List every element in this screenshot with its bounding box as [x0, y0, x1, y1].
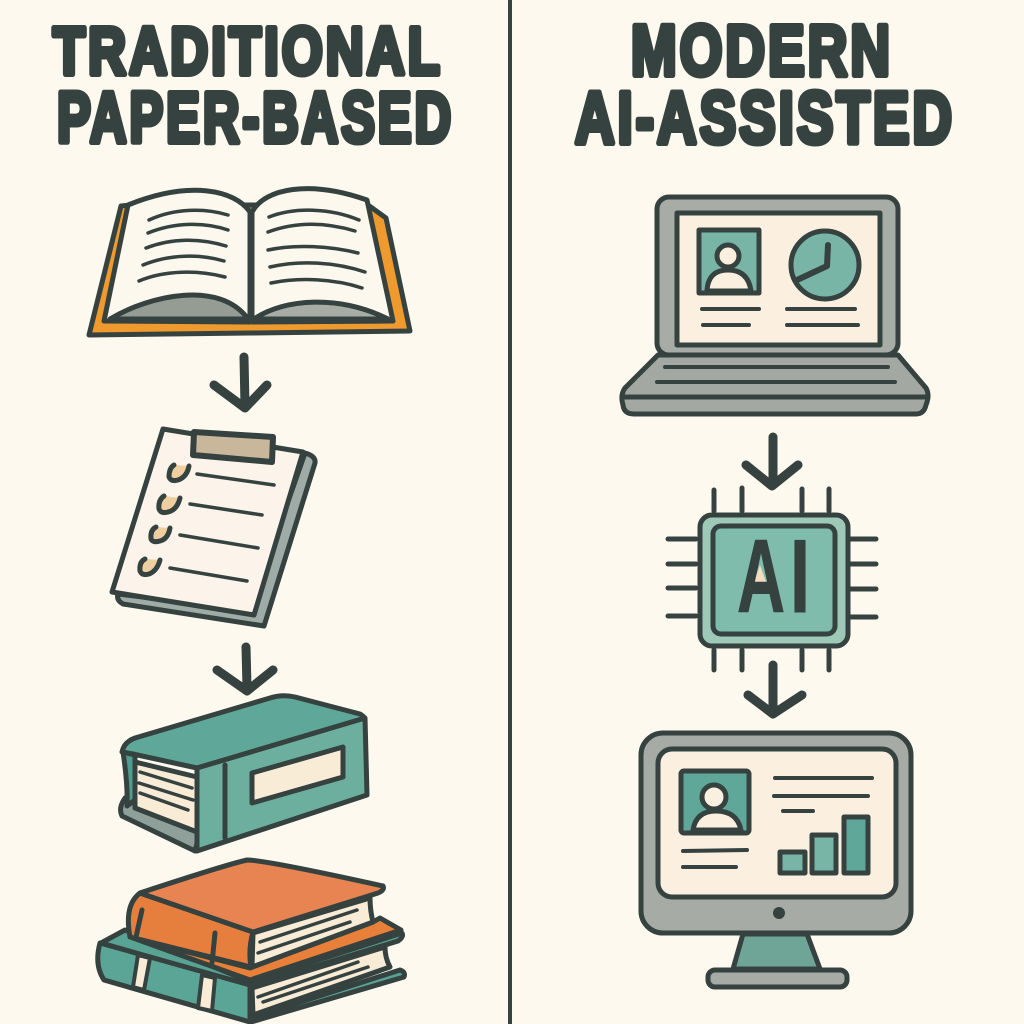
arrow: checklist to textbook — [217, 647, 273, 691]
icon: ai chip — [668, 488, 876, 670]
panel: traditional paper-based — [53, 14, 454, 1022]
arrow: book to checklist — [214, 357, 267, 408]
heading: traditional paper-based: PAPER-BASED — [57, 79, 454, 158]
heading: modern ai-assisted — [575, 12, 955, 159]
bar chart — [780, 817, 868, 873]
avatar card — [699, 230, 759, 293]
panel: modern ai-assisted — [575, 12, 955, 987]
arrow: laptop to ai chip — [746, 437, 798, 486]
clock — [791, 231, 859, 299]
icon: open book — [89, 189, 410, 335]
icon: laptop — [622, 197, 928, 414]
chip pins — [668, 488, 876, 670]
heading: traditional paper-based: TRADITIONAL — [53, 14, 443, 89]
icon: clipboard checklist — [112, 429, 315, 626]
icon: teal textbook — [121, 696, 367, 851]
chip label: I — [790, 519, 810, 635]
chip label: A — [737, 519, 785, 635]
icon: desktop monitor — [641, 733, 911, 987]
laptop base — [622, 355, 928, 414]
icon: stack of books — [98, 860, 404, 1022]
heading: traditional paper-based — [53, 14, 454, 158]
heading: modern ai-assisted: MODERN — [631, 12, 893, 91]
arrow: ai chip to monitor — [748, 665, 802, 714]
avatar card — [681, 771, 749, 833]
